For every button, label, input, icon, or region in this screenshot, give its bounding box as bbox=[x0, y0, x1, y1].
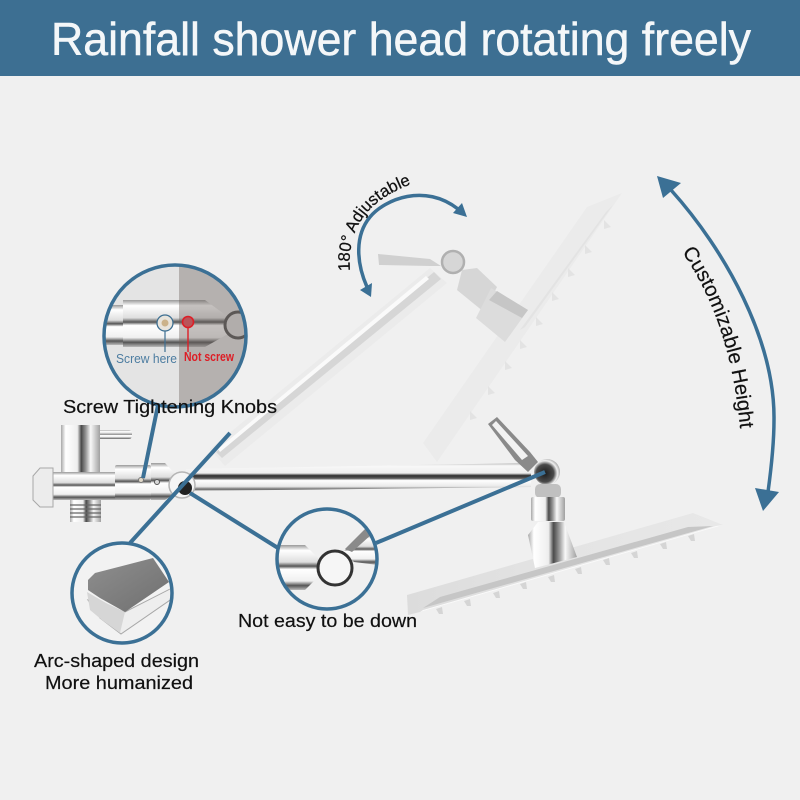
caption: arc-shaped design bbox=[34, 650, 199, 693]
shower head stem bbox=[528, 484, 577, 568]
rotated label: 180 adjustable: 180° Adjustable bbox=[338, 176, 410, 270]
rotated label: customizable height: Customizable Height bbox=[684, 247, 754, 429]
ghost position: raised arm and shower head bbox=[210, 193, 622, 466]
caption: not easy to be down: Not easy to be down bbox=[238, 610, 417, 631]
detail circle: ball joint bbox=[277, 509, 378, 609]
caption: arc-shaped design: More humanized bbox=[45, 672, 193, 693]
arrow: customizable height bbox=[657, 176, 779, 511]
swivel joint bbox=[169, 472, 195, 498]
title banner: Rainfall shower head rotating freely bbox=[51, 13, 752, 65]
arrow: 180 degree rotation bbox=[359, 195, 467, 297]
detail circle: arc-shaped design bbox=[72, 543, 176, 643]
ball joint and lever handle bbox=[488, 417, 560, 485]
caption: screw tightening knobs: Screw Tightening Knobs bbox=[63, 396, 277, 417]
blue leader lines bbox=[130, 405, 545, 548]
label: screw here: Screw here bbox=[116, 351, 177, 366]
shower head plate bbox=[407, 513, 723, 615]
detail circle: screw knob bbox=[103, 265, 251, 407]
caption: arc-shaped design: Arc-shaped design bbox=[34, 650, 199, 671]
label: not screw: Not screw bbox=[184, 350, 234, 364]
main arm bbox=[186, 463, 531, 491]
title banner bbox=[0, 0, 800, 76]
diverter valve bbox=[33, 425, 177, 522]
